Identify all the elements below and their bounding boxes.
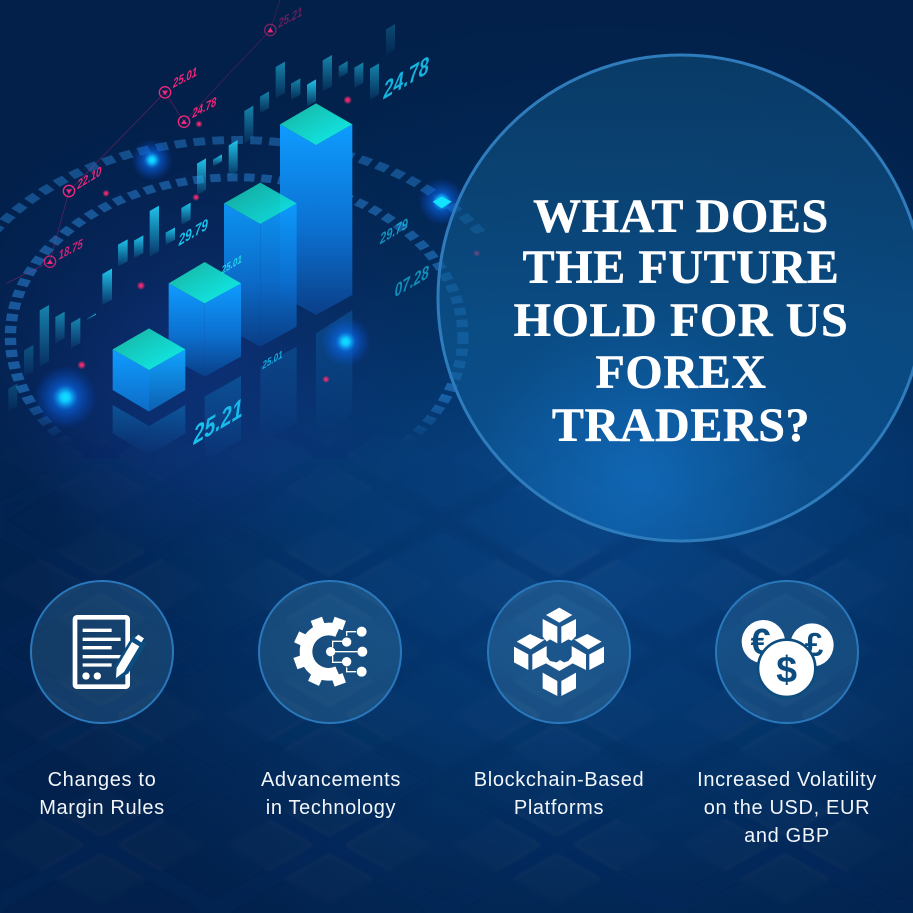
second bar [169, 262, 241, 377]
label: margin rules: Changes to [48, 769, 156, 791]
label: technology: Advancements [261, 769, 401, 791]
icon: coins: £ [805, 627, 824, 664]
label: blockchain: Platforms [514, 797, 604, 819]
dashed rings [0, 136, 485, 438]
background [22, 203, 913, 910]
title circle [438, 55, 913, 541]
icon: connected cubes [514, 608, 604, 696]
pink dots [77, 96, 480, 383]
icon circle: blockchain [488, 581, 630, 723]
title [514, 190, 848, 452]
cyan value labels: 29.79 [178, 216, 208, 251]
label: volatility: and GBP [744, 825, 830, 847]
title: WHAT DOES [533, 190, 829, 243]
title: HOLD FOR US [514, 294, 848, 347]
icon: coins: $ [776, 648, 797, 690]
glowing lights [34, 139, 465, 429]
cyan value labels: 29.79 [379, 214, 408, 248]
icon: coins [742, 620, 834, 697]
icon: gear with nodes [293, 617, 367, 687]
icon circle: technology [259, 581, 401, 723]
label: blockchain: Blockchain-Based [474, 769, 644, 791]
label: volatility: on the USD, EUR [704, 797, 870, 819]
cyan value labels [178, 51, 429, 452]
pink value labels: 22.10 [77, 163, 102, 193]
label on second bar: 25.01 [221, 253, 242, 278]
cyan value labels: 25.01 [262, 349, 283, 373]
icon circle: currencies [716, 581, 858, 723]
cyan value labels: 25.21 [193, 393, 243, 452]
cyan value labels: 07.28 [395, 261, 429, 302]
pink value labels [59, 4, 302, 263]
pink value labels: 24.78 [192, 93, 217, 122]
small candlestick bars [8, 24, 395, 412]
icon: coins: € [751, 621, 771, 662]
third bar [224, 183, 297, 347]
pink value labels: 25.21 [278, 4, 302, 32]
bar reflections [113, 310, 352, 460]
pink value labels: 18.75 [59, 235, 83, 263]
label: volatility: Increased Volatility [697, 769, 877, 791]
icon circle: margin rules [31, 581, 173, 723]
pink value labels: 25.01 [172, 64, 197, 92]
title: THE FUTURE [523, 241, 839, 294]
title: TRADERS? [552, 399, 810, 452]
icon: document and pencil [75, 617, 147, 687]
label: technology: in Technology [266, 797, 396, 819]
first bar [113, 328, 185, 412]
trend line with pink markers [7, 0, 280, 283]
isometric bar chart illustration [0, 0, 524, 533]
title: FOREX [596, 346, 766, 399]
tallest bar [280, 103, 352, 315]
cyan value labels: 24.78 [383, 51, 429, 105]
label: margin rules: Margin Rules [39, 797, 165, 819]
